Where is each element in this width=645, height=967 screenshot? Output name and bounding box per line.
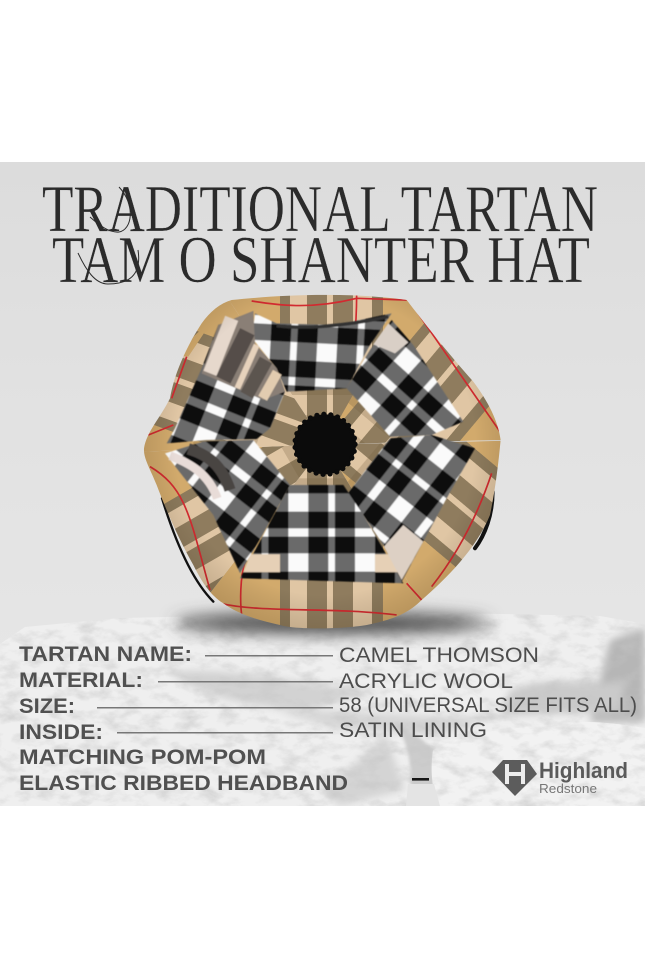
spec labels	[19, 643, 637, 769]
hat dark underside	[162, 492, 493, 602]
black and white plaid panels	[165, 311, 475, 583]
upper-right panel pale corner	[373, 323, 408, 353]
pom-pom	[294, 414, 356, 474]
logo mark	[492, 760, 537, 796]
size row: 58 (UNIVERSAL SIZE FITS ALL)	[339, 693, 637, 717]
material row: ACRYLIC WOOL	[339, 669, 513, 693]
logo: Highland Redstone	[492, 758, 628, 796]
inside row	[19, 718, 487, 744]
bottom panel pale corners	[243, 554, 280, 572]
logo: Highland Redstone: Redstone	[539, 781, 597, 796]
outer camel panels	[144, 294, 500, 628]
size row	[19, 693, 637, 718]
inside row: SATIN LINING	[339, 718, 487, 742]
hat corner camel fills	[184, 302, 231, 357]
title	[42, 172, 598, 297]
hat red stripes	[148, 293, 500, 615]
photo panel background	[0, 162, 645, 806]
tartan hat	[144, 294, 500, 628]
hat shadow	[174, 612, 490, 634]
top panel dark hem	[277, 317, 388, 327]
stone pedestal	[0, 610, 645, 806]
hat edge shading	[144, 298, 500, 628]
lower-left panel dark fold	[170, 449, 230, 498]
headband feature: ELASTIC RIBBED HEADBAND	[19, 772, 348, 795]
pom-pom feature: MATCHING POM-POM	[19, 746, 266, 769]
size row: SIZE:	[19, 695, 75, 718]
tartan name row	[19, 643, 539, 667]
material row	[19, 669, 513, 693]
upper-left panel pale and brown bars	[202, 311, 285, 400]
material row: MATERIAL:	[19, 669, 143, 692]
tartan name row: CAMEL THOMSON	[339, 643, 539, 667]
lower-right panel pale corner	[384, 525, 423, 580]
tartan name row: TARTAN NAME:	[19, 643, 192, 666]
logo: Highland Redstone: Highland	[539, 758, 628, 783]
right boulder	[432, 722, 645, 806]
inside row: INSIDE:	[19, 721, 103, 744]
